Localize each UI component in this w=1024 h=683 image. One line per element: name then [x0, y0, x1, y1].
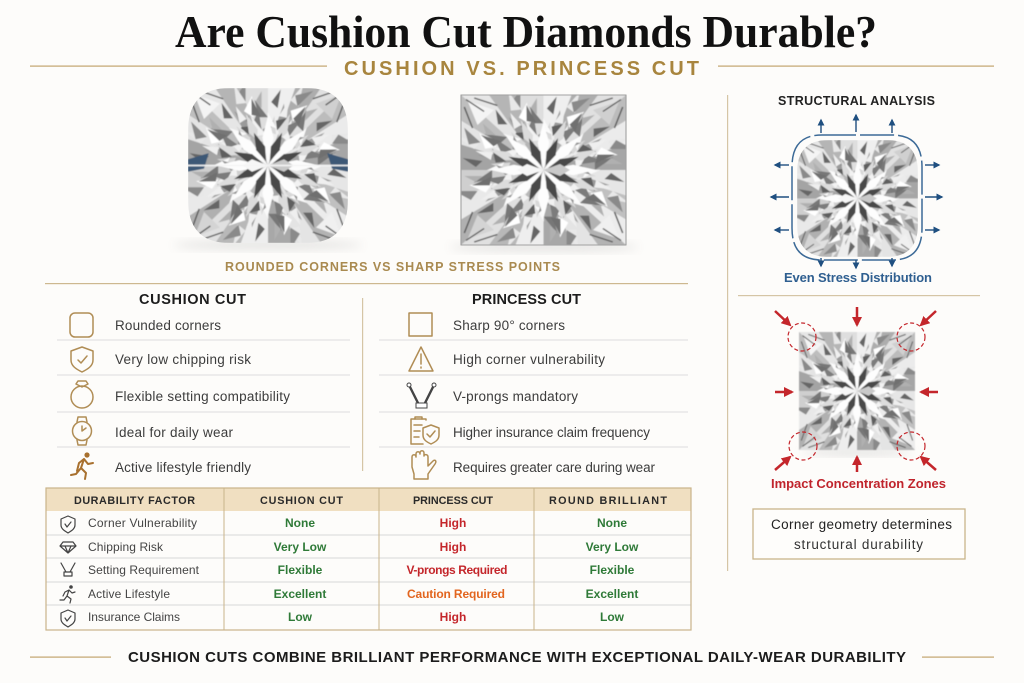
item: rounded corners: [70, 313, 221, 337]
table header: DURABILITY FACTOR: [74, 495, 195, 507]
item: active lifestyle friendly: [71, 452, 251, 479]
item: requires greater care: [412, 451, 656, 479]
row: insurance claims: Low: [600, 610, 625, 624]
table: durability comparison: [46, 488, 691, 630]
heading: cushion cut: CUSHION CUT: [139, 292, 246, 308]
item: high corner vulnerability: [409, 347, 605, 371]
item: flexible setting compatibility: [71, 381, 290, 408]
label: impact zones: Impact Concentration Zones: [771, 476, 946, 491]
row: active lifestyle: Excellent: [586, 587, 638, 601]
corner impact circles: [788, 323, 925, 460]
row: chipping risk: High: [440, 540, 466, 554]
item: very low chipping risk: Very low chipping risk: [115, 352, 251, 367]
row: corner vulnerability: Corner Vulnerability: [88, 516, 197, 530]
heading: structural analysis: STRUCTURAL ANALYSIS: [778, 94, 935, 108]
caption: ROUNDED CORNERS VS SHARP STRESS POINTS: [225, 260, 560, 274]
item: requires greater care: Requires greater care during wear: [453, 460, 656, 475]
row: active lifestyle: Caution Required: [407, 587, 505, 601]
row: chipping risk: Very Low: [586, 540, 639, 554]
row: chipping risk: Chipping Risk: [88, 540, 164, 554]
princess diamond: [449, 87, 639, 253]
callout: corner geometry: Corner geometry determines: [771, 517, 952, 532]
row: chipping risk: Very Low: [274, 540, 327, 554]
table header: ROUND BRILLIANT: [549, 495, 667, 507]
row: setting requirement: [61, 563, 635, 577]
panel: structural analysis, cushion: [771, 94, 942, 285]
row: setting requirement: Setting Requirement: [88, 563, 200, 577]
subtitle: CUSHION VS. PRINCESS CUT: [344, 58, 699, 80]
row: active lifestyle: [60, 585, 638, 603]
item: v-prongs mandatory: [407, 383, 578, 408]
item: ideal for daily wear: Ideal for daily wear: [115, 425, 234, 440]
panel: princess cut list: [379, 292, 688, 479]
title: Are Cushion Cut Diamonds Durable?: [175, 6, 877, 57]
row: insurance claims: [61, 610, 625, 627]
row: insurance claims: Insurance Claims: [88, 610, 180, 624]
diagram: princess diamond: [793, 326, 921, 456]
row: corner vulnerability: High: [440, 516, 466, 530]
row: active lifestyle: Active Lifestyle: [88, 587, 170, 601]
panel: impact concentration, princess: [753, 307, 965, 559]
item: sharp corners: Sharp 90° corners: [453, 318, 565, 333]
table header: [46, 488, 691, 511]
icon: outward stress arrows: [771, 115, 942, 268]
item: flexible setting compatibility: Flexible setting compatibility: [115, 389, 290, 404]
row: insurance claims: Low: [288, 610, 313, 624]
callout: corner geometry: [753, 509, 965, 559]
row: insurance claims: High: [440, 610, 466, 624]
diagram: cushion diamond: [797, 140, 918, 257]
label: even stress: Even Stress Distribution: [784, 270, 932, 285]
item: active lifestyle friendly: Active lifestyle friendly: [115, 460, 251, 475]
table header: PRINCESS CUT: [413, 495, 493, 507]
row: active lifestyle: Excellent: [274, 587, 326, 601]
item: higher insurance claim frequency: Higher insurance claim frequency: [453, 425, 650, 440]
table header: CUSHION CUT: [260, 495, 343, 507]
callout: corner geometry: structural durability: [794, 537, 923, 552]
icon: inward impact arrows: [775, 307, 938, 472]
row: setting requirement: V-prongs Required: [406, 563, 508, 577]
panel: cushion cut list: [57, 292, 350, 479]
row: setting requirement: Flexible: [590, 563, 635, 577]
item: very low chipping risk: [71, 347, 251, 372]
row: corner vulnerability: None: [597, 516, 627, 530]
row: setting requirement: Flexible: [278, 563, 323, 577]
item: sharp corners: [409, 313, 565, 336]
item: ideal for daily wear: [72, 417, 234, 445]
diamond comparison images: [173, 80, 639, 274]
item: rounded corners: Rounded corners: [115, 318, 221, 333]
item: higher insurance claim frequency: [411, 417, 650, 444]
cushion diamond: [184, 88, 352, 252]
item: v-prongs mandatory: V-prongs mandatory: [453, 389, 578, 404]
dashed outline: [792, 135, 922, 260]
item: high corner vulnerability: High corner vulnerability: [453, 352, 605, 367]
row: corner vulnerability: None: [285, 516, 315, 530]
footer banner: CUSHION CUTS COMBINE BRILLIANT PERFORMANCE WITH EXCEPTIONAL DAILY-WEAR DURABILITY: [128, 649, 906, 666]
row: chipping risk: [60, 540, 639, 554]
heading: princess cut: PRINCESS CUT: [472, 292, 581, 308]
row: corner vulnerability: [61, 516, 627, 533]
